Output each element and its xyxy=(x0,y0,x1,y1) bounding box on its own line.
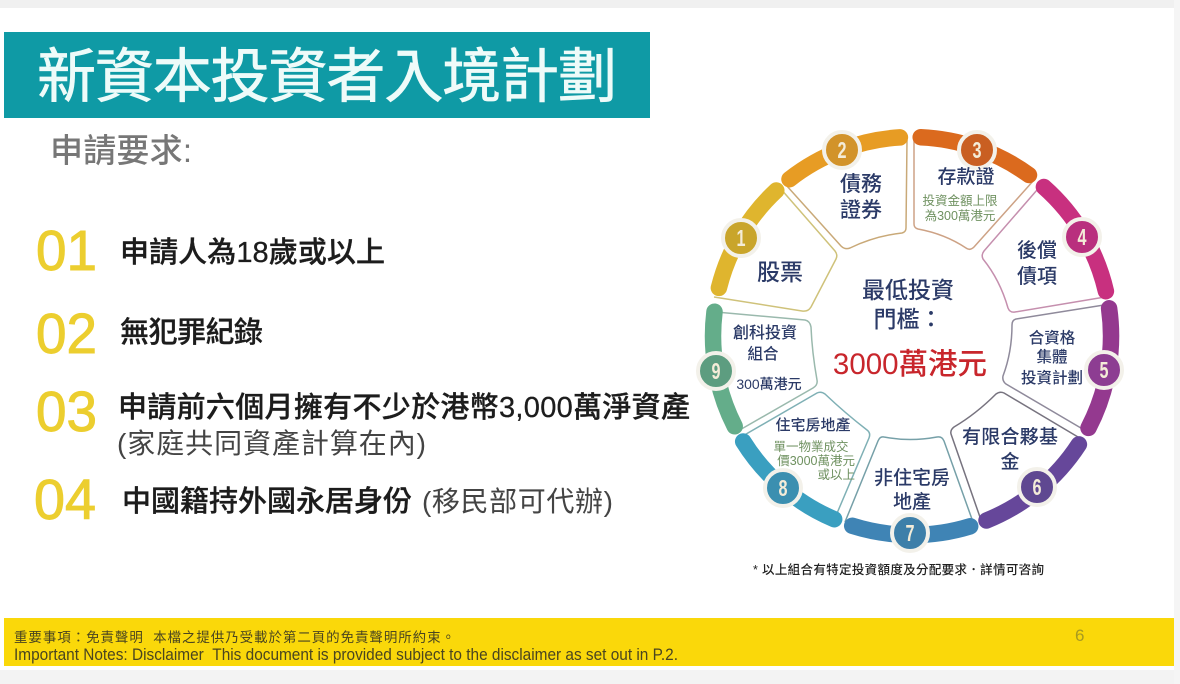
investment wheel xyxy=(698,132,1122,551)
segment 3: certificates of deposit: 存款證 xyxy=(937,166,995,188)
segment 6: limited partnership funds: 6 xyxy=(1032,474,1042,500)
requirement 02: 02 xyxy=(36,302,97,366)
segment 5: collective investment schemes xyxy=(1003,305,1122,431)
subheading: application requirements: 申請要求: xyxy=(50,132,192,169)
segment 9: innovation and technology portfolio: 9 xyxy=(712,358,720,384)
requirement 03: 03 xyxy=(36,380,97,444)
disclaimer bar: 重要事項：免責聲明 本檔之提供乃受載於第二頁的免責聲明所約束。 xyxy=(14,629,455,645)
requirement 01: 01 xyxy=(36,219,97,283)
segment 3: certificates of deposit: 3 xyxy=(972,137,982,163)
segment 4: subordinated debt: 後償 xyxy=(1017,239,1057,262)
requirement 04: 中國籍持外國永居身份 xyxy=(122,485,412,518)
segment 3: certificates of deposit xyxy=(914,132,1034,249)
segment 1: stocks: 1 xyxy=(736,225,746,251)
segment 9: innovation and technology portfolio: 組合 xyxy=(747,345,779,363)
segment 7: non-residential real estate: 地產 xyxy=(893,491,931,513)
requirement 01 xyxy=(36,219,385,283)
title banner: 新資本投資者入境計劃 xyxy=(37,44,617,110)
segment 6: limited partnership funds: 有限合夥基 xyxy=(962,426,1058,448)
segment 3: certificates of deposit: 為300萬港元 xyxy=(925,209,995,223)
footnote: * 以上組合有特定投資額度及分配要求．詳情可咨詢 xyxy=(753,562,1044,577)
requirement 03: (家庭共同資產計算在內) xyxy=(117,428,426,459)
requirement 04: (移民部可代辦) xyxy=(422,486,613,517)
segment 1: stocks xyxy=(714,188,837,311)
segment 7: non-residential real estate: 7 xyxy=(906,520,914,546)
title banner xyxy=(4,32,650,118)
segment 2: bonds: 債務 xyxy=(840,173,882,196)
segment 8: residential real estate: 8 xyxy=(778,475,788,501)
segment 8: residential real estate xyxy=(741,392,870,519)
segment 9: innovation and technology portfolio: 300萬港元 xyxy=(736,376,802,392)
segment 7: non-residential real estate: 非住宅房 xyxy=(874,467,950,489)
requirement 03 xyxy=(36,380,690,459)
segment 4: subordinated debt: 4 xyxy=(1078,224,1087,250)
requirement 02: 無犯罪紀錄 xyxy=(120,316,263,349)
segment 9: innovation and technology portfolio xyxy=(698,312,817,431)
segment 8: residential real estate: 價3000萬港元 xyxy=(777,454,855,468)
segment 8: residential real estate: 或以上 xyxy=(817,468,855,482)
page number: 6 xyxy=(1075,626,1084,645)
segment 6: limited partnership funds: 金 xyxy=(1000,451,1020,473)
centre: minimum investment threshold xyxy=(833,277,987,381)
segment 7: non-residential real estate xyxy=(845,437,973,551)
segment 5: collective investment schemes: 投資計劃 xyxy=(1021,368,1083,387)
segment 2: bonds: 2 xyxy=(838,137,846,163)
requirement 02 xyxy=(36,302,263,366)
segment 6: limited partnership funds xyxy=(951,392,1079,520)
requirement 04 xyxy=(34,468,613,532)
segment 2: bonds xyxy=(786,132,907,249)
segment 4: subordinated debt: 債項 xyxy=(1017,265,1057,288)
segment 8: residential real estate: 住宅房地產 xyxy=(775,416,851,434)
segment 3: certificates of deposit: 投資金額上限 xyxy=(922,193,998,208)
segment 1: stocks: 股票 xyxy=(757,259,803,285)
segment 2: bonds: 證券 xyxy=(840,199,882,222)
requirement 04: 04 xyxy=(34,468,96,532)
centre: minimum investment threshold: 最低投資 xyxy=(862,277,954,303)
segment 5: collective investment schemes: 合資格 xyxy=(1029,328,1076,347)
centre: minimum investment threshold: 門檻： xyxy=(874,306,942,332)
centre: minimum investment threshold: 3000萬港元 xyxy=(833,348,987,381)
requirement 01: 申請人為18歲或以上 xyxy=(120,236,385,269)
segment 4: subordinated debt xyxy=(982,187,1106,312)
requirement 03: 申請前六個月擁有不少於港幣3,000萬淨資產 xyxy=(118,391,690,424)
disclaimer bar: Important Notes: Disclaimer This document is provided subject to the disclaimer as set out in P.2. xyxy=(14,645,678,664)
segment 9: innovation and technology portfolio: 創科投資 xyxy=(733,323,797,342)
segment 8: residential real estate: 單一物業成交 xyxy=(773,439,849,454)
disclaimer bar xyxy=(4,618,1174,666)
segment 5: collective investment schemes: 5 xyxy=(1100,357,1109,383)
segment 5: collective investment schemes: 集體 xyxy=(1036,348,1068,366)
